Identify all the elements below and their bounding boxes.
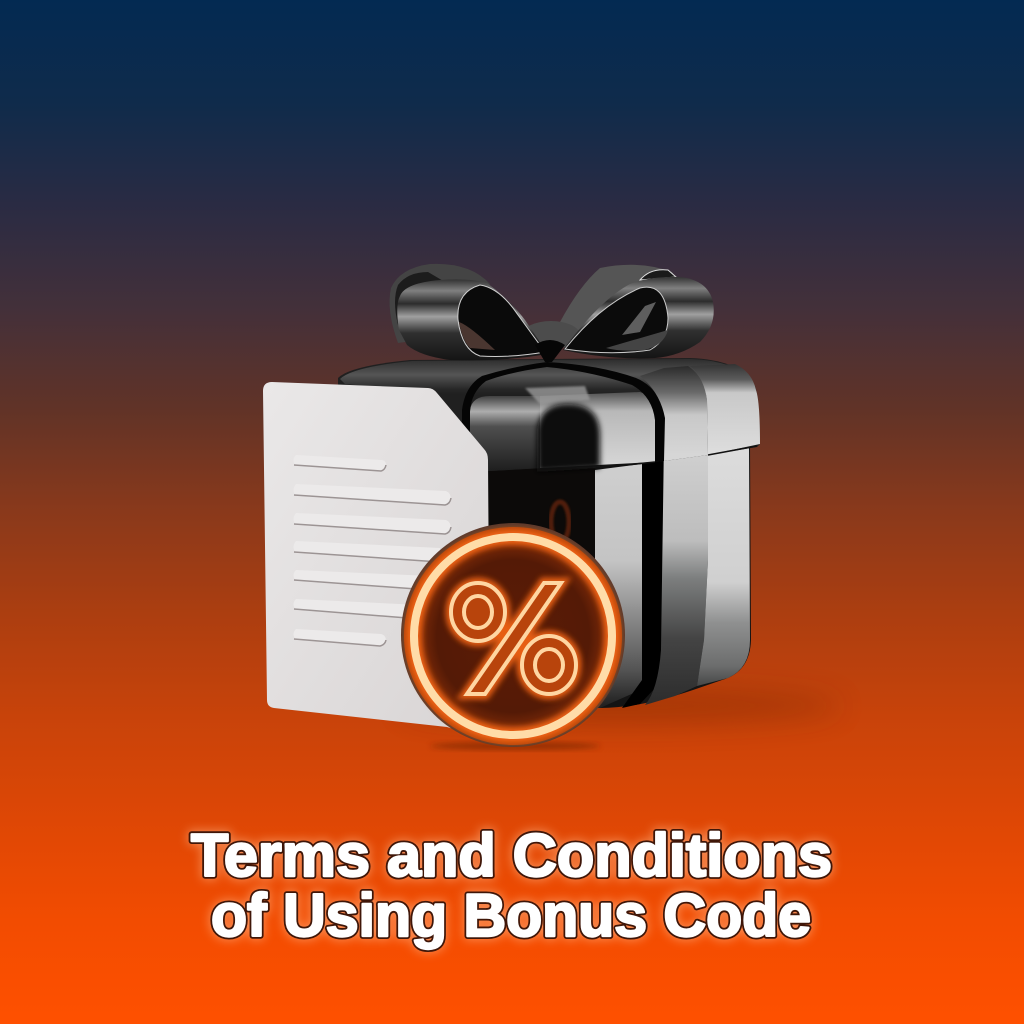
lid front top highlight [525, 386, 590, 404]
box front dark reflection [487, 468, 595, 618]
terms document [263, 382, 490, 740]
document sheet [263, 382, 490, 740]
title [191, 822, 832, 949]
title text [191, 822, 832, 949]
ribbon silver strip [645, 440, 708, 705]
box lid [338, 358, 760, 472]
box side silver face [697, 448, 750, 686]
lid left face [470, 396, 540, 471]
percent coin [401, 523, 625, 747]
box front silver face [595, 464, 645, 708]
lid corner dark shade [537, 404, 600, 472]
left loop inner [458, 285, 545, 356]
title text: of Using Bonus Code [211, 882, 811, 949]
title text: Terms and Conditions [191, 822, 832, 889]
title outline: of Using Bonus Code [211, 882, 811, 949]
ribbon bow [390, 264, 714, 362]
right front loop [563, 277, 714, 358]
embossed text lines [294, 455, 451, 646]
title glow [191, 822, 832, 949]
title outline [191, 822, 832, 949]
title outline: Terms and Conditions [191, 822, 832, 889]
box body [470, 440, 751, 708]
lid right side face [690, 364, 760, 455]
coin rim [401, 523, 625, 747]
title glow: Terms and Conditions [191, 822, 832, 889]
floor shadow [400, 688, 840, 750]
knot centre [535, 340, 565, 362]
right loop inner [565, 287, 668, 353]
back right loop [560, 265, 690, 345]
ribbon dark strip [622, 455, 664, 708]
knot [522, 321, 580, 349]
lid ribbon silver strip [640, 366, 708, 461]
lid top surface highlight [340, 359, 752, 396]
neon ring [414, 537, 612, 735]
title glow: of Using Bonus Code [211, 882, 811, 949]
gift box [338, 264, 760, 708]
coin face [404, 527, 622, 745]
lid ribbon outline [462, 362, 665, 470]
neon percent sign [451, 583, 576, 694]
left front loop [397, 279, 548, 360]
lid right face [540, 392, 655, 468]
back left loop [390, 264, 490, 343]
